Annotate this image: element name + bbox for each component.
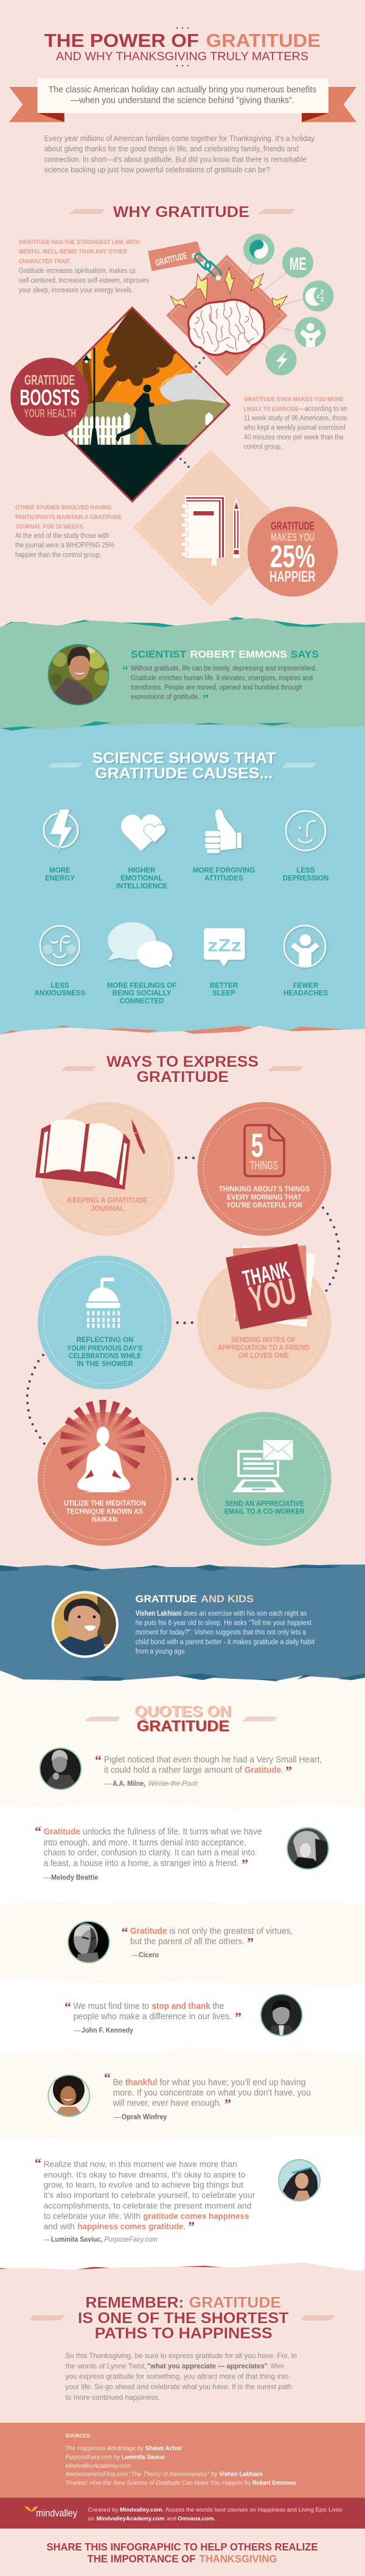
quote: a.a. milne: A.A. Milne,: [113, 1780, 145, 1788]
cause: better sleep: zZz: [207, 936, 242, 956]
heading: remember: [29, 2294, 336, 2342]
quote: john f. kennedy: people who make a difference in our lives.: [73, 2011, 232, 2022]
circle: sleep: Z: [320, 297, 324, 303]
text: exercise: 11 week study of 96 Americans, those: [244, 415, 347, 422]
heading: quotes on gratitude: QUOTES ON: [134, 1703, 231, 1720]
text: exercise: control group.: [244, 444, 282, 451]
share call to action: THE IMPORTANCE OF: [88, 2552, 196, 2564]
heading: ways to express: GRATITUDE: [137, 1069, 229, 1086]
quote: oprah winfrey: Oprah Winfrey: [122, 2114, 167, 2121]
quote: cicero: ”: [247, 1935, 254, 1950]
icon: energy bolt: [44, 809, 78, 852]
heading: ways to express: WAYS TO EXPRESS: [106, 1053, 259, 1070]
icon: meditation rays: [60, 1400, 145, 1470]
road: [77, 445, 188, 500]
text: journal study: the journal were a WHOPPING 25%: [15, 542, 114, 549]
tag: GRATITUDE: [155, 250, 188, 269]
quote: luminita saviuc: it's also important to celebrate yourself, to celebrate your: [44, 2190, 255, 2200]
text: exercise: who kept a weekly journal exercised: [243, 424, 346, 432]
way: keeping a journal: [35, 1102, 175, 1236]
closing paragraph: [66, 2351, 297, 2402]
quote: luminita saviuc: accomplishments, to celebrate the present moment and: [44, 2201, 251, 2211]
title dots top: [176, 27, 189, 29]
portrait: child: [52, 1591, 119, 1658]
quote: cicero: but the parent of all the others.: [130, 1937, 245, 1947]
heading: robert emmons says: ROBERT EMMONS: [190, 649, 287, 660]
footer text: Access the worlds best courses on Happiness and Living Epic Lives: [165, 2507, 342, 2513]
quote: oprah winfrey: for what you have; you'll end up having: [159, 2078, 305, 2088]
quote: john f. kennedy: “: [64, 1999, 71, 2014]
circle: energy: [265, 344, 297, 376]
cause: higher emotional intelligence: EMOTIONAL: [120, 875, 163, 883]
circle: sleep: Z: [320, 289, 324, 296]
heading: remember: IS ONE OF THE SHORTEST: [78, 2310, 288, 2327]
quote: luminita saviuc: Realize that now, in this moment we have more than: [44, 2159, 237, 2169]
badge: 25% happier: HAPPIER: [269, 568, 315, 585]
heading: robert emmons says: [131, 649, 319, 660]
quote: melody beattie: —: [44, 1875, 51, 1882]
cause: fewer headaches: HEADACHES: [283, 990, 328, 997]
heading: remember: GRATITUDE: [189, 2294, 281, 2311]
heading: science shows: GRATITUDE CAUSES...: [95, 765, 273, 782]
quote: a.a. milne: it could hold a rather large amount of: [104, 1765, 243, 1775]
cause: better sleep: [204, 928, 245, 997]
panel: sources: by: [245, 2480, 251, 2487]
quote: oprah winfrey: thankful: [125, 2078, 158, 2088]
quote: oprah winfrey: —: [114, 2114, 122, 2121]
quote text: [122, 664, 317, 706]
text: mental well-being: [19, 238, 149, 294]
quote: john f. kennedy: the: [213, 2001, 224, 2011]
way: thank-you notes: [197, 1244, 331, 1390]
quote: luminita saviuc: —: [44, 2236, 51, 2244]
way: reflecting in the shower: YOUR PREVIOUS DAY'S: [67, 1345, 143, 1352]
cause: more feelings of being socially connected: MORE FEELINGS OF: [107, 982, 176, 990]
panel: sources: PurposeFairy.com: [66, 2454, 112, 2461]
quote: melody beattie: [35, 1824, 330, 1882]
quote: luminita saviuc: happiness comes gratitude: [77, 2221, 184, 2231]
way: keeping a journal: KEEPING A GRATITUDE: [68, 1197, 148, 1205]
ribbon banner: The classic American holiday can actually bring you numerous benefits: [49, 84, 316, 95]
badge: gratitude boosts your health: GRATITUDE: [24, 372, 75, 388]
quote text: ”: [203, 692, 209, 706]
way: meditation: UTILIZE THE MEDITATION: [64, 1500, 146, 1507]
panel: sources: by: [211, 2471, 218, 2478]
quote: luminita saviuc: PurposeFairy.com: [104, 2236, 158, 2244]
intro paragraph: about giving thanks for the good things in life, and celebrating family, friends and: [44, 145, 299, 153]
circle: me: [282, 247, 313, 278]
quote: cicero: Cicero: [139, 1952, 159, 1959]
quote: cicero: —: [131, 1952, 139, 1959]
header: [44, 27, 321, 66]
share call to action: THANKSGIVING: [200, 2552, 277, 2564]
title dots bottom: [176, 65, 189, 66]
fence: [66, 412, 213, 445]
quote text: transforms. People are moved, opened and humbled through: [131, 684, 302, 692]
icon: thank you cards: YOU: [246, 1270, 300, 1320]
badge: 25% happier: MAKES YOU: [271, 531, 315, 543]
portrait: robert emmons: [47, 644, 110, 708]
text: journal study: PARTICIPANTS MAINTAIN A GRATITUDE: [15, 514, 122, 521]
cause: less anxiousness: LESS: [50, 982, 69, 990]
heading: robert emmons says: SAYS: [291, 649, 319, 660]
cause: less depression: DEPRESSION: [283, 875, 328, 883]
title: THE POWER OF: [44, 30, 199, 51]
cause: fewer headaches: FEWER: [293, 982, 319, 990]
way: reflecting in the shower: IN THE SHOWER: [77, 1361, 133, 1368]
quote: oprah winfrey: Be: [113, 2078, 123, 2088]
text: vishen lakhiani: [136, 1610, 315, 1656]
panel: sources: Luminita Saviuc: [122, 2454, 165, 2461]
icon: laptop and envelope: [232, 1440, 293, 1492]
footer text: Created by: [88, 2507, 119, 2513]
text: mental well-being: CHARACTER TRAIT.: [19, 258, 71, 265]
portrait: milne: [39, 1748, 82, 1790]
panel: sources: by: [114, 2454, 120, 2461]
quote: john f. kennedy: John F. Kennedy: [82, 2027, 134, 2034]
panel: sources: [0, 2423, 365, 2498]
way: appreciative email: EMAIL TO A CO-WORKER: [224, 1509, 305, 1516]
intro paragraph: connection. In short—it's about gratitude. But did you know that there is remarkable: [44, 156, 307, 164]
footer text: and: [167, 2516, 176, 2523]
share call to action: [46, 2541, 318, 2564]
text: journal study: At the end of the study those with: [15, 532, 109, 540]
quote: luminita saviuc: [35, 2155, 321, 2244]
brain: [188, 300, 265, 355]
way: appreciative email: SEND AN APPRECIATIVE: [225, 1501, 304, 1508]
badge: 25% happier: GRATITUDE: [271, 520, 315, 532]
icon: pen: [131, 1119, 145, 1154]
text: journal study: [15, 504, 122, 559]
share call to action: SHARE THIS INFOGRAPHIC TO HELP OTHERS REALIZE: [46, 2541, 318, 2553]
text: vishen lakhiani: does an exercise with his son each night as: [184, 1610, 307, 1617]
icon: meditating figure: [77, 1427, 130, 1492]
text: vishen lakhiani: moment for today?". Vishen suggests that this not only lets a: [136, 1629, 307, 1636]
logo: mindvalley: mindvalley: [36, 2507, 77, 2519]
cause: more forgiving attitudes: MORE FORGIVING: [193, 867, 255, 875]
closing paragraph: So this Thanksgiving, be sure to express gratitude for all you have. For, in: [66, 2351, 297, 2360]
panel: sources: AwesomenessFest.com "The Theory of Awesomeness": [65, 2471, 209, 2478]
cause: fewer headaches: [283, 926, 328, 997]
band: scientist quote: [0, 617, 365, 731]
runner: [116, 384, 162, 445]
quote: a.a. milne: Winnie-the-Pooh: [148, 1780, 198, 1788]
cause: higher emotional intelligence: [116, 814, 167, 890]
cause: more energy: MORE: [49, 867, 71, 875]
portrait: cicero: [67, 1921, 111, 1966]
text: mental well-being: Gratitude increases spiritualism, makes us: [19, 267, 136, 275]
footer text: on: [88, 2516, 94, 2523]
icon: person in circle: [284, 926, 325, 967]
text: vishen lakhiani: he puts his 6 year old to sleep. He asks "Tell me your happiest: [136, 1619, 312, 1627]
quote text: “: [122, 664, 128, 677]
panel: sources: The Happiness Advantage: [66, 2445, 136, 2452]
quotes background: [0, 1672, 365, 2276]
way: thank-you notes: SENDING NOTES OF: [231, 1337, 296, 1344]
cause: more feelings of being socially connected: CONNECTED: [120, 998, 164, 1005]
title: GRATITUDE: [206, 30, 321, 51]
quote: oprah winfrey: “: [104, 2070, 111, 2085]
quote: luminita saviuc: .: [184, 2221, 186, 2231]
footer text: Mindvalley.com.: [120, 2507, 164, 2513]
portrait: kennedy: [260, 1994, 304, 2037]
quote: a.a. milne: —: [105, 1780, 113, 1788]
cause: less anxiousness: [35, 926, 86, 997]
panel: sources: Shawn Achor: [145, 2445, 182, 2452]
heading: remember: REMEMBER:: [85, 2294, 184, 2311]
portrait: beattie: [286, 1827, 330, 1871]
panel: sources: Thanks!: How the New Science of Gratitude Can Make You Happier: [66, 2480, 243, 2487]
panel: sources: MindvalleyAcademy.com: [66, 2463, 131, 2470]
heading: quotes on gratitude: GRATITUDE: [137, 1718, 229, 1735]
quote: john f. kennedy: —: [74, 2027, 81, 2034]
panel: sources: Vishen Lakhiani: [219, 2471, 263, 2478]
icon: smiling face: [286, 811, 325, 850]
quote: oprah winfrey: more. If you concentrate on what you don't have, you: [113, 2088, 311, 2098]
quote: oprah winfrey: [47, 2070, 311, 2121]
way: thinking about 5 things: YOU'RE GRATEFUL FOR: [226, 1202, 303, 1210]
badge: gratitude boosts your health: BOOSTS: [19, 385, 80, 410]
closing paragraph: you express gratitude for something, you attract more of that thing into: [66, 2372, 289, 2381]
text: journal study: OTHER STUDIES INVOLVED HAVING: [15, 504, 111, 511]
circle: yin yang: [243, 233, 274, 265]
cause: more energy: [44, 809, 78, 883]
subtitle: AND WHY THANKSGIVING TRULY MATTERS: [56, 50, 308, 63]
quote: melody beattie: a feast, a house into a home, a stranger into a friend.: [44, 1858, 239, 1868]
icon: 5 things note: THINGS: [250, 1159, 278, 1173]
intro paragraph: science backing up just how powerful celebrations of gratitude can be?: [44, 165, 270, 174]
brain diagram: [148, 233, 333, 376]
text: exercise: —according to an: [299, 405, 347, 413]
heading: science shows: SCIENCE SHOWS THAT: [92, 750, 276, 767]
circle: happy person: [294, 317, 326, 350]
heading: gratitude and kids: AND KIDS: [201, 1594, 254, 1605]
quote: melody beattie: into enough, and more. It turns denial into acceptance,: [44, 1837, 246, 1848]
icon: open book: [35, 1119, 130, 1190]
connector dots lower: [179, 458, 190, 468]
logo: mindvalley: [24, 2506, 77, 2519]
quote: a.a. milne: .: [281, 1765, 283, 1775]
cause: higher emotional intelligence: HIGHER: [128, 867, 156, 875]
way: thinking about 5 things: [197, 1102, 331, 1236]
heading: remember: PATHS TO HAPPINESS: [95, 2325, 273, 2342]
cause: better sleep: SLEEP: [212, 990, 235, 997]
quote text: Gratitude enriches human life. It elevates, energizes, inspires and: [131, 675, 313, 682]
heading: quotes on gratitude: [85, 1703, 278, 1735]
way: thinking about 5 things: THINKING ABOUT 5 THINGS: [219, 1186, 310, 1193]
panel: sources: SOURCES:: [66, 2433, 91, 2439]
way: keeping a journal: JOURNAL: [91, 1205, 125, 1213]
quote: luminita saviuc: ”: [188, 2219, 195, 2234]
text: vishen lakhiani: Vishen Lakhiani: [136, 1610, 181, 1617]
quote: a.a. milne: [39, 1748, 321, 1790]
closing paragraph: the words of Lynne Twist,: [66, 2362, 147, 2371]
text: journal study: happier than the control group.: [15, 552, 102, 559]
text: mental well-being: GRATITUDE HAS THE STRONGEST LINK WITH: [19, 238, 140, 246]
text: exercise: [243, 396, 347, 451]
text: mental well-being: your sleep, increases your energy levels.: [19, 287, 133, 294]
icon: shower head: [86, 1278, 120, 1328]
tree canopy: [92, 309, 176, 404]
cause: better sleep: BETTER: [210, 982, 238, 990]
icon: thank you cards: [226, 1244, 316, 1329]
text: exercise: LIKELY TO EXERCISE: [244, 405, 299, 413]
footer: mindvalley: [0, 2498, 365, 2529]
portrait: oprah: [47, 2074, 91, 2118]
diamond: [166, 255, 288, 376]
way: reflecting in the shower: CELEBRATIONS WHILE: [69, 1352, 141, 1360]
connector lines: [245, 263, 304, 351]
badge: gratitude boosts your health: YOUR HEALTH: [24, 407, 76, 421]
quote: cicero: is not only the greatest of virtues,: [169, 1926, 293, 1937]
icon: speech bubbles: [108, 922, 173, 968]
notebook: [181, 495, 225, 567]
cause: more feelings of being socially connected: BEING SOCIALLY: [113, 990, 172, 997]
quote: luminita saviuc: Luminita Saviuc,: [51, 2236, 102, 2244]
closing paragraph: . When: [268, 2362, 284, 2371]
text: vishen lakhiani: child bond with a parent better - it makes gratitude a daily habit: [136, 1639, 315, 1646]
text: mental well-being: self-centered, increases self-esteem, improves: [19, 277, 149, 284]
way: meditation: NAIKAN: [92, 1516, 117, 1523]
circle: sleep: [303, 281, 333, 311]
text: exercise: GRATITUDE EVEN MAKES YOU MORE: [244, 396, 344, 403]
circle: sleep: z: [316, 293, 321, 299]
heading: why gratitude: [69, 204, 294, 221]
cause: less depression: LESS: [296, 867, 315, 875]
icon: thumbs up: [205, 810, 242, 853]
heading: gratitude and kids: GRATITUDE: [136, 1594, 197, 1605]
lightning bolts: [170, 267, 287, 310]
quote: a.a. milne: Gratitude: [245, 1765, 281, 1775]
icon: hearts: [121, 814, 165, 851]
grass: [64, 399, 228, 445]
quote: cicero: [67, 1921, 293, 1966]
lamp post: [83, 348, 98, 445]
way: meditation: TECHNIQUE KNOWN AS: [66, 1509, 143, 1516]
text: exercise: 40 minutes more per week than the: [244, 434, 344, 441]
quote: melody beattie: chaos to order, confusion to clarity. It can turn a meal into: [44, 1848, 255, 1858]
icon: zzz bubble: [204, 928, 245, 966]
cause: more forgiving attitudes: ATTITUDES: [204, 875, 243, 883]
portrait: luminita: [278, 2159, 321, 2202]
badge: gratitude boosts your health: [10, 357, 89, 436]
footer text: MindvalleyAcademy.com: [96, 2516, 165, 2523]
text: journal study: JOURNAL FOR 10 WEEKS.: [15, 523, 85, 530]
quote: melody beattie: “: [35, 1824, 41, 1839]
heading: robert emmons says: SCIENTIST: [131, 649, 186, 660]
ribbon banner: [9, 78, 356, 122]
dotted connectors: [26, 1156, 340, 1481]
peach diamond with notebook: [133, 450, 288, 606]
quote: melody beattie: ”: [242, 1856, 248, 1872]
ribbon banner: —when you understand the science behind "giving thanks".: [71, 95, 294, 106]
cause: less anxiousness: ANXIOUSNESS: [35, 990, 86, 997]
quote: john f. kennedy: stop and thank: [152, 2001, 210, 2011]
quote: melody beattie: Melody Beattie: [51, 1875, 99, 1882]
badge: 25% happier: 25%: [270, 539, 315, 574]
way: meditation: [38, 1400, 172, 1546]
text: mental well-being: MENTAL WELL-BEING THAN ANY OTHER: [19, 248, 127, 255]
quote: john f. kennedy: ”: [235, 2009, 242, 2025]
tag: [148, 241, 204, 271]
closing paragraph: your life. So go ahead and celebrate what you have. It is the surest path: [66, 2383, 292, 2391]
quote: luminita saviuc: grow, to learn, to evolve and to achieve big things but: [44, 2180, 243, 2189]
torn edge: blue to pink: [0, 1025, 365, 1216]
circle: me: ME: [290, 254, 307, 274]
closing pink section: [0, 2262, 365, 2425]
closing paragraph: to more continued happiness.: [66, 2393, 160, 2402]
quote: luminita saviuc: “: [35, 2155, 41, 2171]
quote: melody beattie: Gratitude: [44, 1827, 80, 1837]
badge: 25% happier: [248, 507, 338, 597]
quote: a.a. milne: “: [95, 1752, 102, 1768]
quote: a.a. milne: Piglet noticed that even though he had a Very Small Heart,: [104, 1754, 322, 1765]
quote: luminita saviuc: to celebrate your life. With: [44, 2211, 141, 2221]
way: reflecting in the shower: REFLECTING ON: [76, 1337, 133, 1344]
band: gratitude and kids: [0, 1565, 365, 1681]
pencil: [233, 497, 240, 558]
heading: ways to express: [61, 1053, 304, 1086]
heading: science shows: [47, 750, 318, 782]
panel: sources: by: [137, 2445, 144, 2452]
quote: melody beattie: unlocks the fullness of life. It turns what we have: [83, 1827, 262, 1837]
cause: more feelings of being socially connected: [107, 922, 176, 1005]
way: appreciative email: [197, 1412, 331, 1546]
closing paragraph: "what you appreciate --- appreciates": [147, 2362, 268, 2371]
cause: higher emotional intelligence: INTELLIGENCE: [116, 883, 167, 890]
icon: 5 things note: [245, 1125, 284, 1176]
quote: luminita saviuc: and with: [44, 2221, 75, 2231]
text: vishen lakhiani: from a young age.: [136, 1648, 186, 1656]
cause: more forgiving attitudes: [193, 810, 255, 883]
way: thank-you notes: OR LOVED ONE: [238, 1352, 289, 1360]
heading: why gratitude: WHY GRATITUDE: [113, 204, 249, 221]
connector dots upper: [195, 357, 205, 368]
title: [44, 30, 321, 51]
quote: cicero: “: [122, 1924, 128, 1940]
cause: less depression: [283, 811, 328, 883]
quote: oprah winfrey: ”: [224, 2096, 231, 2112]
panel: sources: Robert Emmons: [252, 2480, 296, 2487]
icon: thank you cards: THANK: [240, 1256, 292, 1291]
chain: [193, 252, 223, 279]
icon: 5 things note: 5: [251, 1126, 263, 1164]
quote: luminita saviuc: gratitude comes happiness: [143, 2211, 249, 2221]
quote: cicero: Gratitude: [130, 1926, 167, 1937]
icon: calm face: [40, 926, 80, 965]
intro paragraph: Every year millions of American families come together for Thanksgiving. It's a holiday: [44, 134, 315, 143]
cause: more energy: ENERGY: [45, 875, 75, 883]
quote: luminita saviuc: enough. It's okay to have dreams, it's okay to aspire to: [44, 2169, 246, 2179]
footer text: [88, 2507, 342, 2523]
scene diamond: runner: [63, 306, 231, 503]
quote text: Without gratitude, life can be lonely, depressing and impoverished.: [131, 665, 317, 672]
quote: a.a. milne: ”: [285, 1763, 292, 1779]
heading: gratitude and kids: [136, 1594, 254, 1605]
footer text: Omvana.com.: [178, 2516, 215, 2523]
intro paragraph: [44, 134, 315, 174]
way: thinking about 5 things: EVERY MORNING THAT: [227, 1194, 302, 1201]
blue section background: [0, 720, 365, 1036]
way: thank-you notes: APPRECIATION TO A FRIEND: [218, 1345, 310, 1352]
quote: john f. kennedy: [64, 1994, 304, 2037]
quote: john f. kennedy: We must find time to: [73, 2001, 149, 2011]
way: reflecting in the shower: [38, 1256, 172, 1390]
quote text: expressions of gratitude.: [131, 694, 200, 701]
quote: oprah winfrey: will never, ever have enough.: [113, 2098, 221, 2109]
